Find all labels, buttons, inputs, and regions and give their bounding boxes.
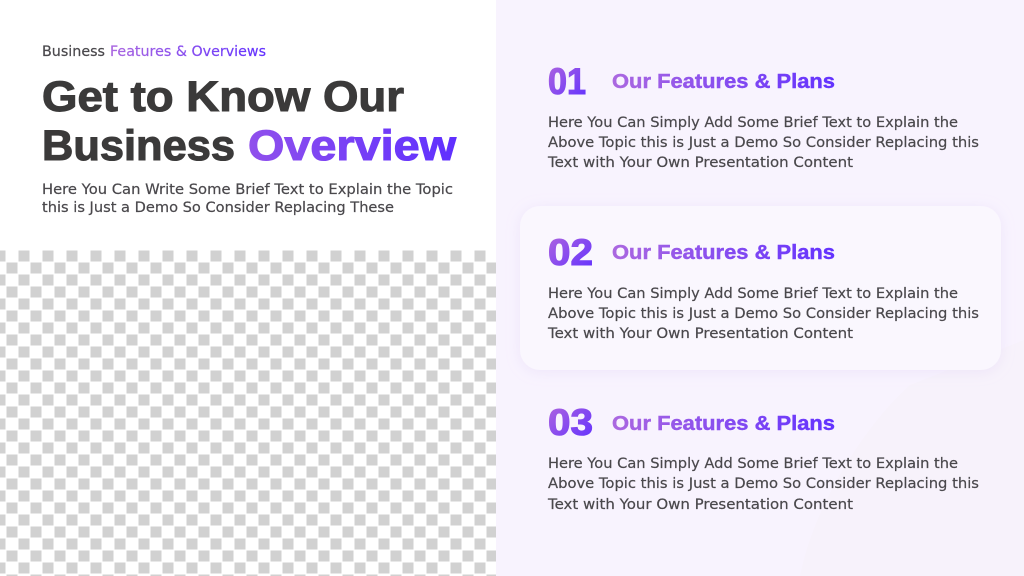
- heading 03: Our Features & Plans: [612, 413, 835, 435]
- body 03: [547, 456, 979, 513]
- heading 01: Our Features & Plans: [612, 71, 835, 93]
- number 02: 02: [548, 232, 593, 273]
- image placeholder: transparency checkerboard: [0, 250, 496, 576]
- body 03: Text with Your Own Presentation Content: [547, 497, 854, 513]
- intro text line 1: Here You Can Write Some Brief Text to Explain the Topic: [42, 182, 453, 198]
- number 01: 01: [548, 61, 586, 102]
- card background: [520, 206, 1001, 370]
- body 02: Here You Can Simply Add Some Brief Text to Explain the: [548, 286, 958, 302]
- intro text line 2: this is Just a Demo So Consider Replacing These: [42, 200, 394, 216]
- body 02: [547, 286, 979, 342]
- body 03: Above Topic this is Just a Demo So Consider Replacing this: [548, 476, 979, 492]
- kicker: Business: [42, 44, 105, 60]
- panel: business overview intro: [42, 44, 457, 216]
- feature 03: [547, 402, 979, 513]
- body 02: Text with Your Own Presentation Content: [547, 326, 854, 342]
- panel: right background: [496, 0, 1024, 576]
- body 01: Above Topic this is Just a Demo So Consider Replacing this: [548, 135, 979, 151]
- number 03: 03: [548, 402, 593, 443]
- body 02: Above Topic this is Just a Demo So Consider Replacing this: [548, 306, 979, 322]
- title line 1: Get to Know Our: [42, 73, 404, 121]
- body 01: Here You Can Simply Add Some Brief Text to Explain the: [548, 115, 958, 131]
- body 03: Here You Can Simply Add Some Brief Text to Explain the: [548, 456, 958, 472]
- body 01: Text with Your Own Presentation Content: [547, 155, 854, 171]
- highlighted card: feature 02: [520, 206, 1001, 370]
- body 01: [547, 115, 979, 171]
- heading 02: Our Features & Plans: [612, 242, 835, 264]
- title highlight: Overview: [248, 122, 457, 170]
- kicker highlight: Features & Overviews: [110, 44, 266, 60]
- title line 2: Business: [42, 122, 235, 170]
- feature 01: [547, 61, 979, 171]
